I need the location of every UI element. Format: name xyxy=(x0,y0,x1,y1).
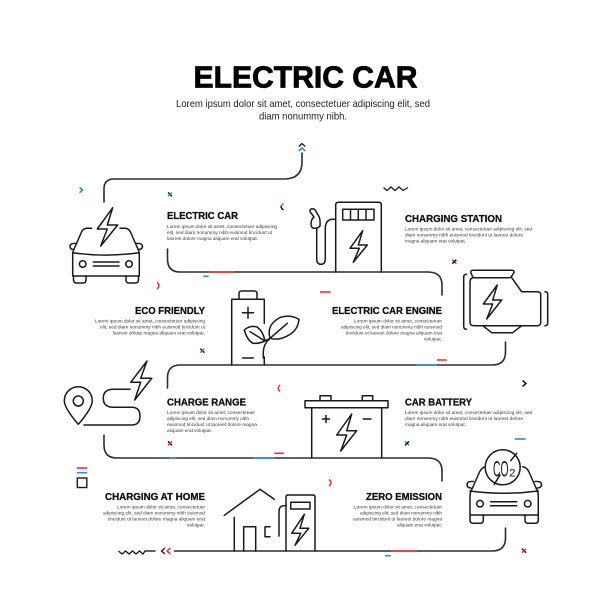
icon: charging at home xyxy=(224,489,315,551)
title: ELECTRIC CAR xyxy=(194,60,418,94)
text: electric car engine: adipiscing elit, sed diam nonummy nibh euismod xyxy=(341,324,442,330)
icon: zero emission car: CO xyxy=(493,457,508,482)
text: zero emission: aliquam erat volutpat. xyxy=(397,522,442,528)
text: zero emission: euismod tincidunt ut laoreet dolore magna xyxy=(353,516,442,522)
icon: car battery xyxy=(305,396,388,458)
text: electric car engine: volutpat. xyxy=(424,336,442,342)
text: electric car xyxy=(167,224,277,242)
icon: zero emission car xyxy=(467,450,542,523)
subtitle: Lorem ipsum dolor sit amet, consectetuer adipiscing elit, sed xyxy=(176,99,430,110)
text: eco friendly xyxy=(95,318,206,336)
text: electric car engine: Lorem ipsum dolor sit amet, consectetuer xyxy=(354,318,442,324)
text: charge range: euismod tincidunt ut laoreet dolore magna xyxy=(167,422,257,428)
text: charging at home: volutpat. xyxy=(187,522,205,528)
connector path: top xyxy=(104,144,305,202)
subtitle: diam nonummy nibh. xyxy=(259,112,347,122)
text: car battery xyxy=(405,410,532,428)
text: charging station: Lorem ipsum dolor sit amet, consectetuer adipiscing elit, sed xyxy=(405,226,532,232)
icon: charging station xyxy=(310,202,381,272)
heading: car battery: CAR BATTERY xyxy=(405,398,472,408)
text: eco friendly: elit, sed diam nonummy nibh euismod tincidunt ut xyxy=(100,324,206,330)
icon: electric car xyxy=(70,208,142,283)
text: charging station: magna aliquam erat volutpat. xyxy=(405,238,466,244)
heading: charging at home: CHARGING AT HOME xyxy=(105,492,205,503)
text: charging at home xyxy=(103,504,206,528)
text: electric car engine xyxy=(341,318,443,342)
text: electric car engine: tincidunt ut laoreet dolore magna aliquam erat xyxy=(346,330,443,336)
decorative accents xyxy=(77,187,526,556)
text: charging at home: adipiscing elit, sed diam nonummy nibh euismod xyxy=(103,510,205,516)
connector path: row 3 xyxy=(104,435,442,481)
text: zero emission: adipiscing elit, sed diam nonummy nibh xyxy=(360,510,442,516)
text: electric car: laoreet dolore magna aliquam erat volutpat. xyxy=(167,236,258,242)
heading: charging station: CHARGING STATION xyxy=(405,214,502,225)
connector path: row 2 xyxy=(168,342,506,388)
text: car battery: magna aliquam erat volutpat. xyxy=(405,422,466,428)
text: eco friendly: laoreet dolore magna aliquam erat volutpat. xyxy=(113,330,205,336)
connector path: row 1 xyxy=(168,249,442,295)
heading: charge range: CHARGE RANGE xyxy=(167,398,246,408)
text: charge range xyxy=(167,410,257,434)
text: zero emission: Lorem ipsum dolor sit amet, consectetuer xyxy=(354,504,442,510)
heading: electric car engine: ELECTRIC CAR ENGINE xyxy=(332,306,442,317)
text: electric car: elit, sed diam nonummy nibh euismod tincidunt ut xyxy=(167,230,273,236)
text: zero emission xyxy=(353,504,442,528)
text: electric car: Lorem ipsum dolor sit amet, consectetuer adipiscing xyxy=(167,224,277,230)
text: car battery: Lorem ipsum dolor sit amet, consectetuer adipiscing elit, sed xyxy=(405,410,532,416)
heading: eco friendly: ECO FRIENDLY xyxy=(135,306,205,317)
subtitle xyxy=(176,99,430,122)
text: charge range: Lorem ipsum dolor sit amet, consectetuer xyxy=(167,410,255,416)
text: charge range: aliquam erat volutpat. xyxy=(167,428,212,434)
text: charge range: adipiscing elit, sed diam nonummy nibh xyxy=(167,416,249,422)
text: car battery: diam nonummy nibh euismod tincidunt ut laoreet dolore xyxy=(405,416,523,422)
heading: electric car: ELECTRIC CAR xyxy=(167,211,239,222)
text: eco friendly: Lorem ipsum dolor sit amet, consectetuer adipiscing xyxy=(95,318,205,324)
heading: zero emission: ZERO EMISSION xyxy=(366,492,442,503)
icon: charge range xyxy=(64,361,152,425)
text: charging at home: tincidunt ut laoreet dolore magna aliquam erat xyxy=(108,516,206,522)
text: charging station xyxy=(405,226,532,244)
icon: car engine xyxy=(464,270,548,333)
text: CO2 subscript: 2 xyxy=(509,468,516,480)
icon: eco friendly battery and leaves xyxy=(232,291,299,365)
connector path: bottom xyxy=(118,528,506,554)
text: charging at home: Lorem ipsum dolor sit amet, consectetuer xyxy=(117,504,205,510)
text: charging station: diam nonummy nibh euismod tincidunt ut laoreet dolore xyxy=(405,232,523,238)
